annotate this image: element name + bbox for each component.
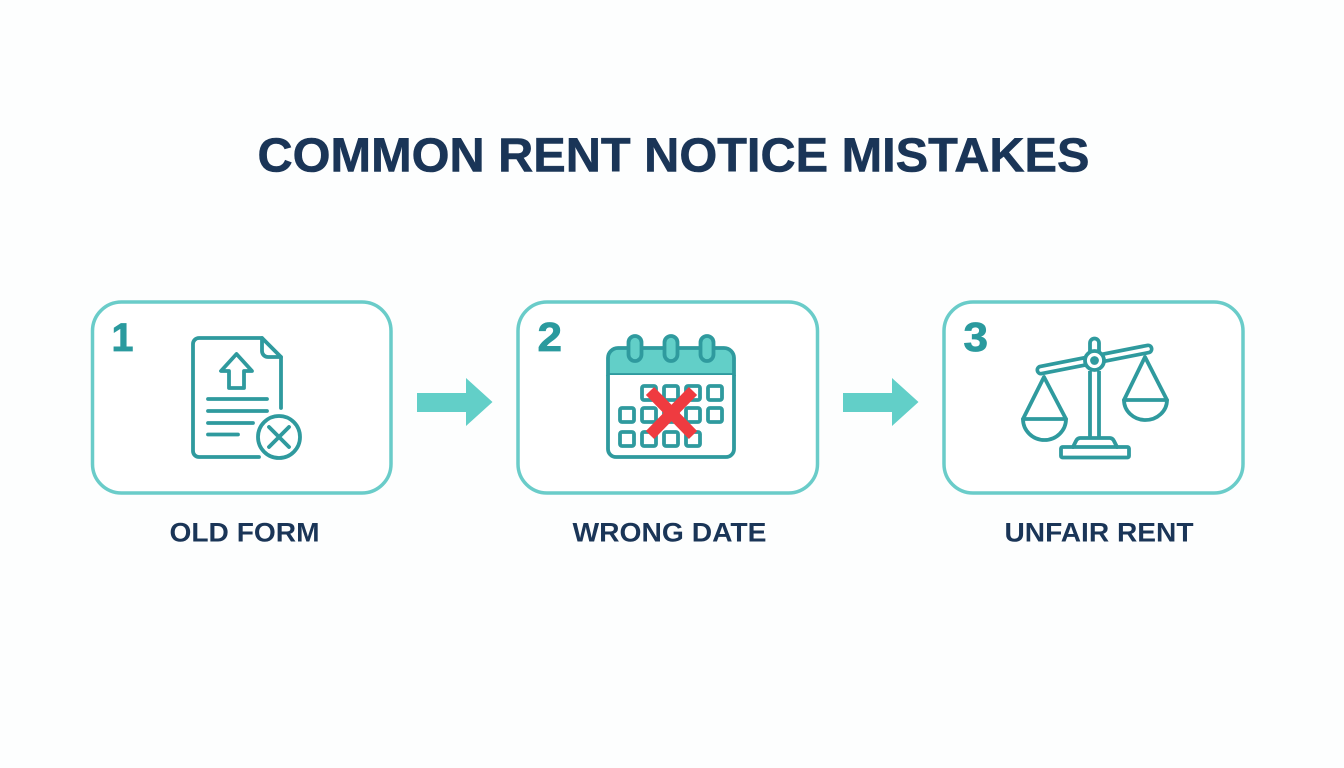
- panel: wrong date: [518, 302, 818, 493]
- step number 1: 1: [112, 316, 133, 360]
- arrow 2 to 3: [843, 378, 918, 426]
- icon: calendar with red cross: [608, 336, 734, 457]
- label: unfair rent: UNFAIR RENT: [1004, 518, 1194, 548]
- label: old form: OLD FORM: [170, 518, 320, 548]
- icon: rejected form document: [193, 338, 300, 458]
- panel: old form: [92, 302, 391, 493]
- icon: unbalanced scales: [1023, 338, 1167, 458]
- panel: unfair rent: [944, 302, 1243, 493]
- title: COMMON RENT NOTICE MISTAKES: [258, 130, 1090, 182]
- arrow 1 to 2: [417, 378, 492, 426]
- step number 2: 2: [538, 314, 562, 360]
- label: wrong date: WRONG DATE: [572, 518, 766, 548]
- step number 3: 3: [964, 314, 988, 360]
